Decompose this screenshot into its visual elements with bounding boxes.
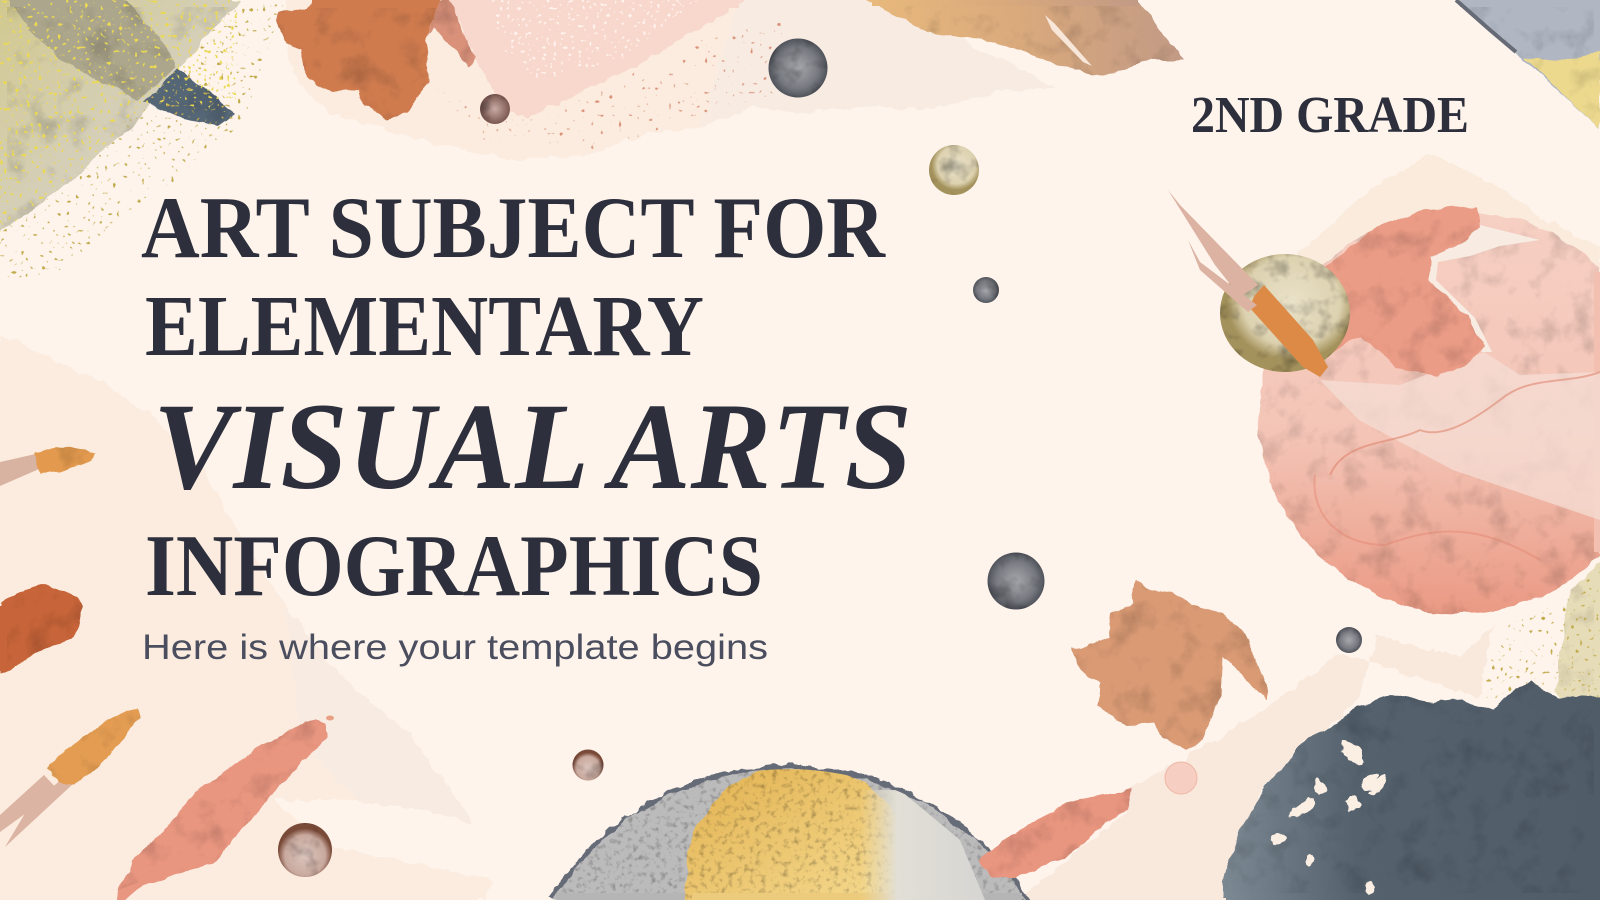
speckles: red flecks	[420, 20, 790, 150]
foil: gold centre	[685, 764, 985, 900]
panel: right salmon watercolor planet	[1259, 205, 1600, 613]
spots: cream flecks	[1272, 737, 1391, 894]
ball: dark top	[768, 38, 828, 98]
speck: salmon dot	[326, 716, 334, 720]
slit: pale streak	[1045, 15, 1092, 66]
panel: pink watercolor wash	[420, 0, 790, 150]
ball: dark lower	[988, 552, 1044, 610]
band: pale translucent overlay	[1314, 215, 1600, 560]
speckles: yellow glitter	[0, 0, 240, 232]
speckles: gold scatter right	[1480, 570, 1600, 700]
ball: large gold circle	[1220, 254, 1350, 372]
title line 1: ART SUBJECT FOR	[141, 180, 886, 277]
grade label: 2ND GRADE	[1191, 87, 1469, 144]
dab: orange	[34, 447, 95, 474]
tail: second pink streak	[1188, 240, 1257, 312]
panel: top-left gold and grey wedge	[0, 0, 285, 285]
title line 3: emphasis: VISUAL ARTS	[153, 378, 912, 515]
brush blob: top orange	[276, 0, 474, 118]
stroke: orange body	[46, 707, 141, 783]
subtitle: Here is where your template begins	[142, 628, 768, 667]
ball: brown bottom centre	[572, 750, 604, 780]
panel: top-right corner grey and yellow	[1456, 0, 1600, 130]
edge: dark line	[1456, 0, 1516, 52]
speckles: white flecks	[490, 0, 700, 80]
panel: left beige watercolor wash	[0, 335, 490, 900]
panel: bottom gold and silver planet	[548, 764, 1030, 900]
ball: brown large bottom left	[278, 823, 332, 877]
title	[141, 180, 912, 615]
ball: pale pink	[1165, 762, 1197, 794]
brush stroke: orange over gold circle	[1168, 190, 1328, 377]
speckles: gold scatter	[0, 0, 285, 285]
band: olive wedge stripe	[10, 0, 176, 100]
brush blob: peach	[1070, 580, 1269, 750]
brush stroke: bottom salmon	[979, 788, 1132, 877]
brush stroke: top brown and gold streak	[866, 0, 1185, 75]
ball: small dark lower right	[1336, 627, 1362, 653]
tail: orange arm	[426, 0, 474, 68]
panel: top beige watercolor wash	[286, 0, 1055, 160]
panel: bottom right beige wash	[1019, 623, 1494, 900]
title line 2: ELEMENTARY	[145, 277, 704, 374]
brush stroke: dark blue	[145, 68, 235, 126]
ball: small dark middle	[973, 277, 999, 303]
shape: salmon swirl	[1310, 205, 1484, 377]
fill: silver body	[552, 769, 1026, 900]
ball: gold top	[929, 145, 979, 195]
brush stroke: long salmon	[117, 722, 327, 900]
panel: bottom-right gold wedge	[1480, 563, 1600, 710]
brush stroke: left top orange dab	[0, 447, 95, 486]
brush stroke: left orange with tails	[0, 707, 141, 847]
wash: grey right edge	[286, 607, 474, 823]
wash: grey right part	[700, 0, 1055, 128]
panel: dark ink blob	[1223, 682, 1600, 900]
ball: small brown top	[480, 94, 510, 124]
title line 4: INFOGRAPHICS	[145, 518, 763, 615]
brush stroke: left red-brown blob	[0, 583, 84, 675]
tail: second pink streak	[5, 780, 74, 847]
panel: right beige wash	[1300, 153, 1600, 420]
tail: first pink streak	[1168, 190, 1258, 297]
streak: yellow	[1524, 52, 1600, 130]
